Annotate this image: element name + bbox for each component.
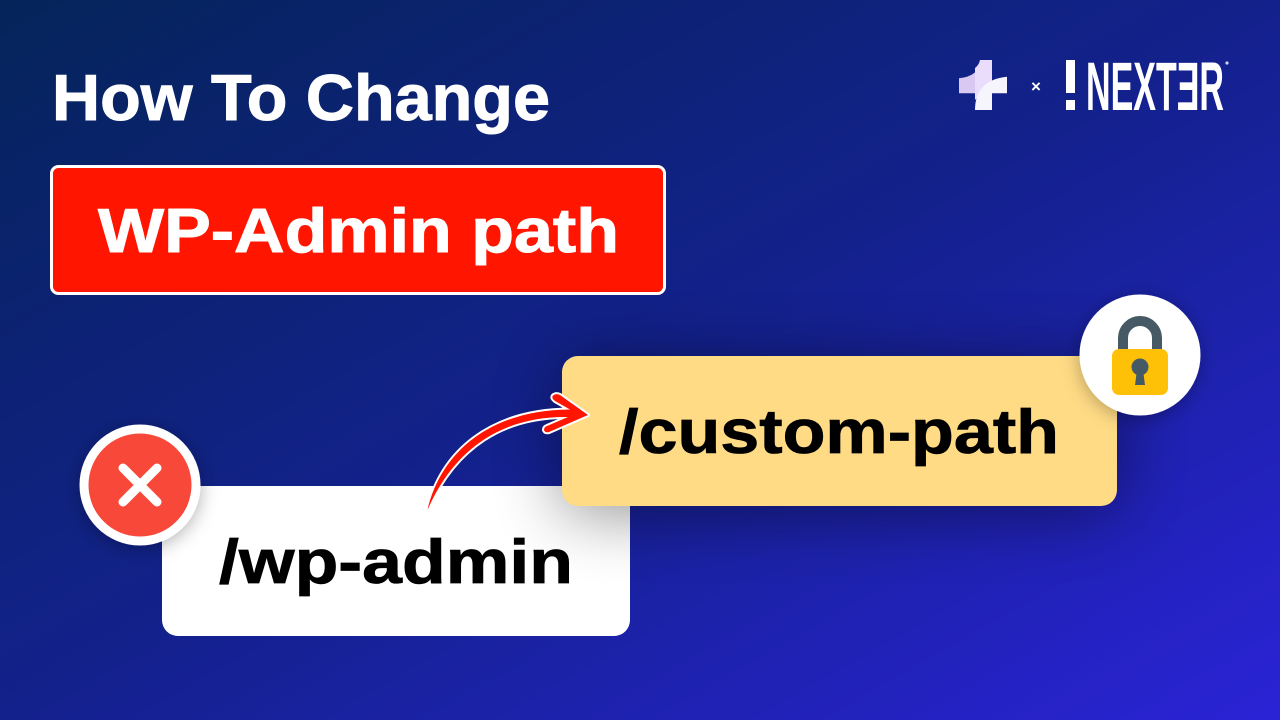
arrow: from wp-admin to custom-path (428, 394, 588, 510)
banner: WP-Admin path: WP-Admin path (98, 197, 619, 266)
banner: WP-Admin path (52, 166, 664, 294)
icon: red cross badge (80, 424, 200, 546)
card: /wp-admin: /wp-admin (219, 528, 573, 597)
title: How To Change: How To Change (52, 61, 550, 134)
logo: Nexter wordmark (1066, 48, 1229, 125)
logo: partner plus mark (959, 60, 1007, 110)
logo separator: times sign: × (1031, 77, 1041, 96)
icon: padlock badge (1080, 294, 1200, 416)
card: /custom-path: /custom-path (619, 398, 1059, 467)
card: /custom-path (562, 356, 1117, 512)
card: /wp-admin (162, 486, 630, 636)
